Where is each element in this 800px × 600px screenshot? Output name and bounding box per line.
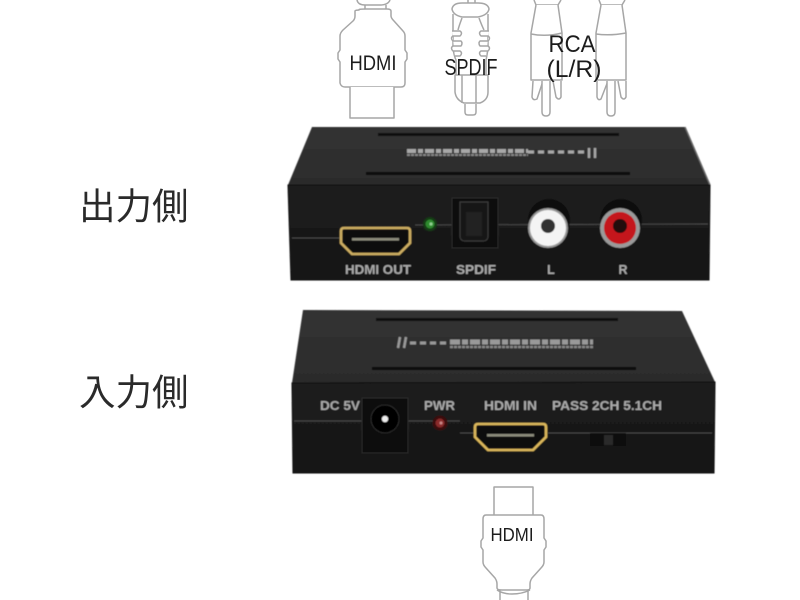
label: RCA (L/R): (L/R) bbox=[546, 56, 602, 83]
device: output side bbox=[288, 127, 710, 280]
port: HDMI OUT bbox=[341, 228, 410, 254]
port: HDMI IN bbox=[475, 424, 546, 450]
device top panel bbox=[292, 310, 715, 383]
label: HDMI bottom: HDMI bbox=[490, 525, 534, 545]
heading: input side: 入力側 bbox=[79, 372, 188, 413]
port labels: HDMI OUT bbox=[345, 263, 411, 277]
port labels: PWR bbox=[424, 399, 455, 413]
port labels bbox=[345, 263, 628, 277]
heading: output side: 出力側 bbox=[79, 186, 188, 227]
label: RCA (L/R) bbox=[546, 31, 602, 83]
port labels: SPDIF bbox=[456, 263, 496, 277]
port labels bbox=[320, 399, 662, 413]
device front panel bbox=[292, 382, 715, 473]
label: SPDIF: SPDIF bbox=[444, 54, 498, 80]
icon: RCA plugs bbox=[531, 0, 626, 116]
device: input side bbox=[292, 310, 715, 473]
label: HDMI top: HDMI bbox=[350, 52, 396, 75]
switch: pass 2ch 5.1ch bbox=[590, 433, 626, 446]
device front panel bbox=[288, 185, 710, 280]
port: SPDIF optical bbox=[452, 198, 498, 248]
port: RCA R red bbox=[600, 199, 642, 248]
port labels: L bbox=[547, 263, 555, 277]
brand logo bbox=[398, 337, 593, 348]
port: DC 5V jack bbox=[362, 398, 408, 453]
port: RCA L white bbox=[528, 199, 570, 248]
port labels: PASS 2CH 5.1CH bbox=[552, 399, 662, 413]
brand logo, mirrored bbox=[407, 148, 595, 158]
port labels: R bbox=[618, 263, 628, 277]
left RCA plug bbox=[531, 0, 562, 116]
port labels: DC 5V bbox=[320, 399, 361, 413]
icon: HDMI plug bottom bbox=[481, 487, 546, 600]
LED: red bbox=[432, 416, 448, 430]
label: RCA (L/R): RCA bbox=[548, 31, 596, 58]
right RCA plug bbox=[596, 0, 626, 116]
device top panel bbox=[288, 127, 710, 185]
port labels: HDMI IN bbox=[484, 399, 537, 413]
LED: green bbox=[423, 217, 437, 231]
icon: HDMI plug top bbox=[338, 0, 407, 118]
icon: SPDIF plug bbox=[444, 0, 498, 115]
